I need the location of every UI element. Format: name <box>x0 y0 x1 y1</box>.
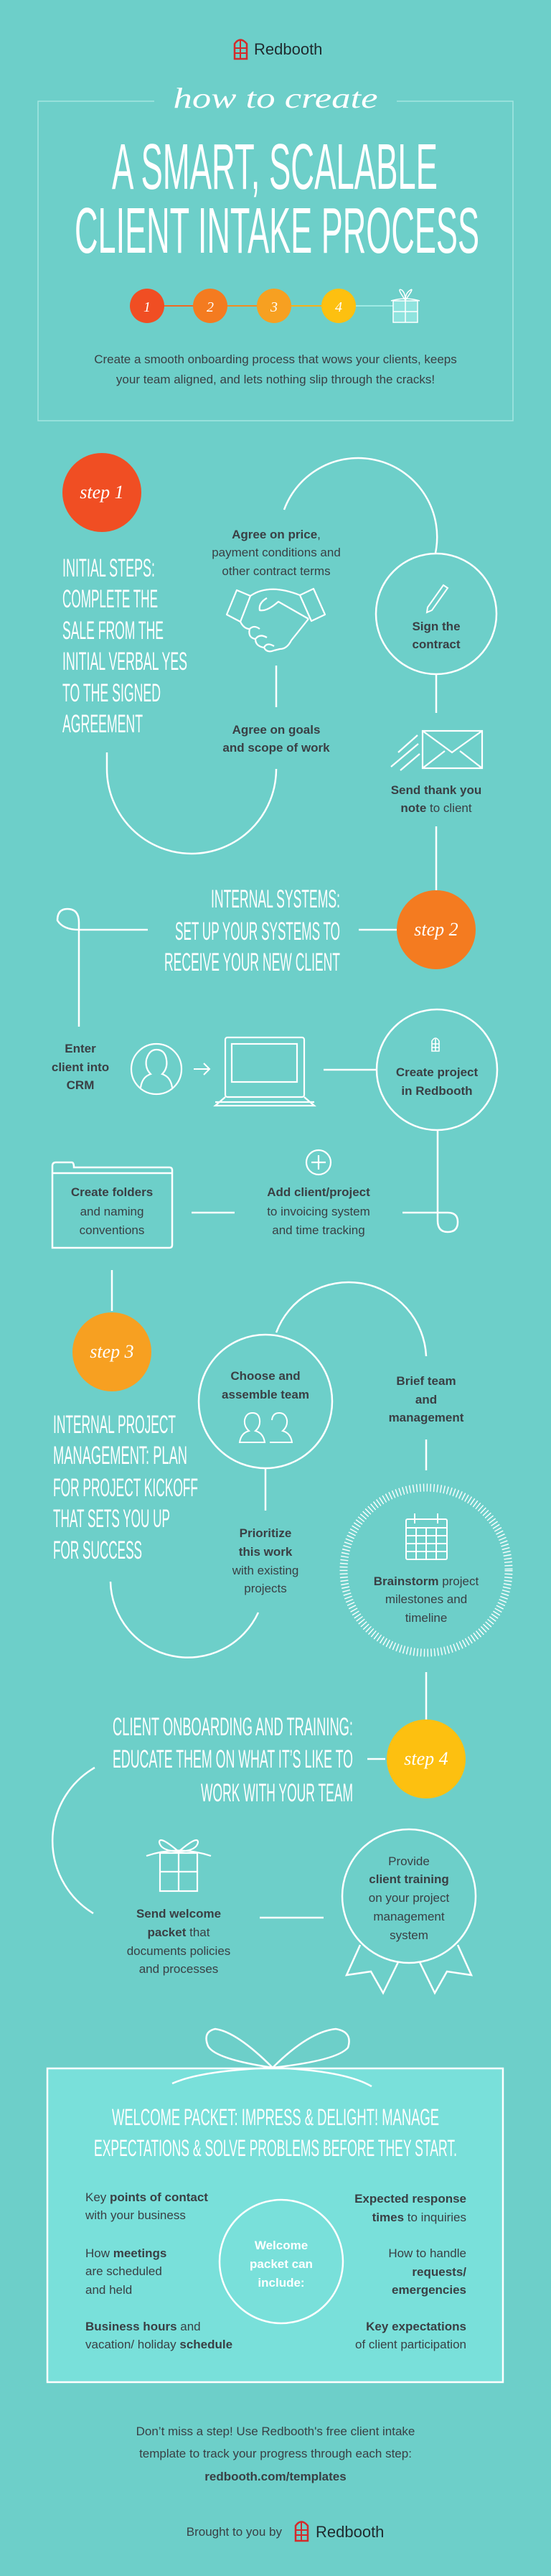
dashed circle: brainstorm milestones: milestones and <box>385 1592 467 1606</box>
text: FOR PROJECT KICKOFF <box>53 1474 198 1502</box>
text: send welcome packet: packet that <box>148 1926 210 1939</box>
text: brief team and management: and <box>415 1393 437 1406</box>
dashed circle: brainstorm milestones <box>344 1488 509 1653</box>
text: add client/project: Add client/project <box>267 1185 370 1199</box>
panel: welcome packet: of client participation <box>355 2338 466 2351</box>
text: agree on price <box>212 528 341 578</box>
step 1 heading: INITIAL STEPS: <box>62 554 155 582</box>
step 2 badge <box>397 890 476 969</box>
badge: provide client training: client training <box>369 1872 449 1886</box>
text: send thank you note: Send thank you <box>391 783 481 797</box>
panel: welcome packet: emergencies <box>392 2283 466 2297</box>
text: add client/project <box>267 1185 370 1237</box>
step 3 badge: step 3 <box>90 1341 134 1362</box>
panel: welcome packet: Welcome <box>255 2239 308 2252</box>
panel: welcome packet <box>47 2029 503 2382</box>
badge: provide client training: management <box>373 1910 445 1923</box>
step 4 badge: step 4 <box>404 1748 448 1769</box>
icon: handshake <box>227 589 325 651</box>
text: brief team and management: management <box>389 1411 464 1424</box>
intro text <box>94 353 457 386</box>
step 2 heading: INTERNAL SYSTEMS: <box>211 885 340 913</box>
text: agree on price: Agree on price, <box>232 528 321 541</box>
text: add client/project: and time tracking <box>272 1223 365 1237</box>
progress steps indicator: 3 <box>270 299 278 315</box>
footer call to action: Don’t miss a step! Use Redbooth's free client intake <box>136 2425 415 2438</box>
text: agree on price: payment conditions and <box>212 546 341 559</box>
circle: sign the contract <box>376 554 496 674</box>
icon: plus <box>306 1150 331 1175</box>
panel: welcome packet: Expected response <box>354 2192 466 2206</box>
step 1 heading: SALE FROM THE <box>62 617 164 645</box>
panel: welcome packet: Key points of contact <box>85 2190 208 2204</box>
step 1 heading: AGREEMENT <box>62 710 143 738</box>
text: brief team and management: Brief team <box>396 1374 456 1388</box>
panel: welcome packet: How to handle <box>388 2246 466 2260</box>
panel: welcome packet: packet can <box>250 2257 313 2271</box>
panel: welcome packet: How meetings <box>85 2246 166 2260</box>
circle: sign the contract: Sign the <box>412 620 461 633</box>
step 4 connector lines <box>52 1759 385 1918</box>
folder: create folders: conventions <box>80 1223 144 1237</box>
text: send welcome packet: and processes <box>139 1962 218 1976</box>
text: send thank you note <box>391 783 481 815</box>
circle: choose and assemble team: Choose and <box>230 1369 301 1383</box>
folder: create folders: Create folders <box>71 1185 153 1199</box>
step 4 badge <box>387 1719 466 1798</box>
title <box>75 131 479 267</box>
text: WORK WITH YOUR TEAM <box>201 1779 353 1807</box>
header frame <box>38 101 513 421</box>
text: prioritize this work: projects <box>244 1582 287 1595</box>
text: send thank you note: note to client <box>400 801 472 815</box>
intro text: your team aligned, and lets nothing slip through the cracks! <box>116 373 435 386</box>
text: agree on goals <box>222 723 330 755</box>
circle: create project in redbooth: Create project <box>396 1065 478 1079</box>
text: enter client into CRM: CRM <box>67 1078 94 1092</box>
step 1 heading: INITIAL VERBAL YES <box>62 648 187 676</box>
step 3 heading: INTERNAL PROJECT <box>53 1411 176 1439</box>
footer call to action: template to track your progress through each step: <box>139 2447 412 2460</box>
badge: provide client training <box>342 1829 476 1993</box>
circle: sign the contract: contract <box>412 638 461 651</box>
folder: create folders <box>52 1162 172 1248</box>
progress steps indicator: 1 <box>143 299 151 315</box>
text: prioritize this work: this work <box>239 1545 293 1559</box>
footer call to action <box>136 2425 415 2483</box>
arrow <box>194 1063 209 1075</box>
footer call to action: redbooth.com/templates <box>204 2470 347 2483</box>
text: SET UP YOUR SYSTEMS TO <box>175 918 340 946</box>
panel: welcome packet: times to inquiries <box>372 2211 466 2224</box>
panel: welcome packet: Key expectations <box>366 2320 466 2333</box>
step 3 heading <box>53 1411 198 1564</box>
step 3 heading: MANAGEMENT: PLAN <box>53 1442 187 1470</box>
step 1 connector lines <box>107 458 437 890</box>
footer brought to you by <box>187 2521 384 2541</box>
panel: welcome packet: include: <box>258 2276 305 2290</box>
icon: person <box>131 1044 182 1094</box>
progress steps indicator <box>130 289 420 323</box>
step 3 connector lines <box>110 1282 426 1719</box>
badge: provide client training: system <box>390 1928 428 1942</box>
footer brought to you by: Redbooth <box>316 2523 384 2541</box>
text: brief team and management <box>389 1374 464 1424</box>
text: add client/project: to invoicing system <box>267 1205 370 1218</box>
dashed circle: brainstorm milestones: timeline <box>405 1611 447 1625</box>
step 2 heading: RECEIVE YOUR NEW CLIENT <box>164 948 340 976</box>
script subtitle: how to create: how to create <box>174 82 377 114</box>
panel: welcome packet: vacation/ holiday schedule <box>85 2338 232 2351</box>
step 2 badge: step 2 <box>414 919 458 940</box>
text: agree on price: other contract terms <box>222 564 331 578</box>
intro text: Create a smooth onboarding process that wows your clients, keeps <box>94 353 457 366</box>
step 2 connector lines <box>57 909 458 1311</box>
icon: laptop <box>215 1037 314 1106</box>
text: enter client into CRM: client into <box>52 1060 109 1074</box>
text: send welcome packet: Send welcome <box>136 1907 221 1921</box>
text: send welcome packet: documents policies <box>127 1944 230 1958</box>
step 1 heading <box>62 554 187 738</box>
step 3 heading: THAT SETS YOU UP <box>53 1505 170 1533</box>
step 4 heading <box>113 1713 353 1807</box>
badge: provide client training: Provide <box>388 1854 430 1868</box>
circle: create project in redbooth <box>377 1009 497 1130</box>
icon: gift small <box>146 1840 211 1891</box>
text: prioritize this work: with existing <box>232 1564 298 1577</box>
circle: create project in redbooth: in Redbooth <box>401 1084 473 1098</box>
text: send welcome packet <box>127 1907 230 1976</box>
icon: envelope <box>391 731 482 770</box>
panel: welcome packet: with your business <box>85 2208 186 2222</box>
step 1 badge <box>62 453 141 532</box>
bow <box>172 2029 372 2086</box>
logo: Redbooth top: Redbooth <box>254 40 322 58</box>
circle: choose and assemble team <box>199 1335 332 1468</box>
text: prioritize this work <box>232 1526 298 1595</box>
panel: welcome packet: and held <box>85 2283 132 2297</box>
progress steps indicator: 4 <box>335 299 342 315</box>
dashed circle: brainstorm milestones: Brainstorm project <box>374 1574 479 1588</box>
step 3 badge <box>72 1312 151 1391</box>
text: enter client into CRM: Enter <box>65 1042 96 1055</box>
text: prioritize this work: Prioritize <box>240 1526 291 1540</box>
folder: create folders: and naming <box>80 1205 143 1218</box>
progress steps indicator: 2 <box>207 299 214 315</box>
panel: welcome packet: are scheduled <box>85 2264 162 2278</box>
step 1 heading: COMPLETE THE <box>62 585 158 613</box>
circle: choose and assemble team: assemble team <box>222 1388 309 1401</box>
step 1 badge: step 1 <box>80 482 124 503</box>
step 2 heading <box>164 885 340 976</box>
step 3 heading: FOR SUCCESS <box>53 1536 142 1564</box>
panel: welcome packet: Business hours and <box>85 2320 201 2333</box>
text: agree on goals: and scope of work <box>222 741 330 755</box>
footer brought to you by: Brought to you by <box>187 2525 282 2539</box>
text: agree on goals: Agree on goals <box>232 723 320 737</box>
badge: provide client training: on your project <box>369 1891 450 1905</box>
panel: welcome packet: requests/ <box>412 2265 466 2279</box>
text: enter client into CRM <box>52 1042 109 1092</box>
step 1 heading: TO THE SIGNED <box>62 679 161 707</box>
